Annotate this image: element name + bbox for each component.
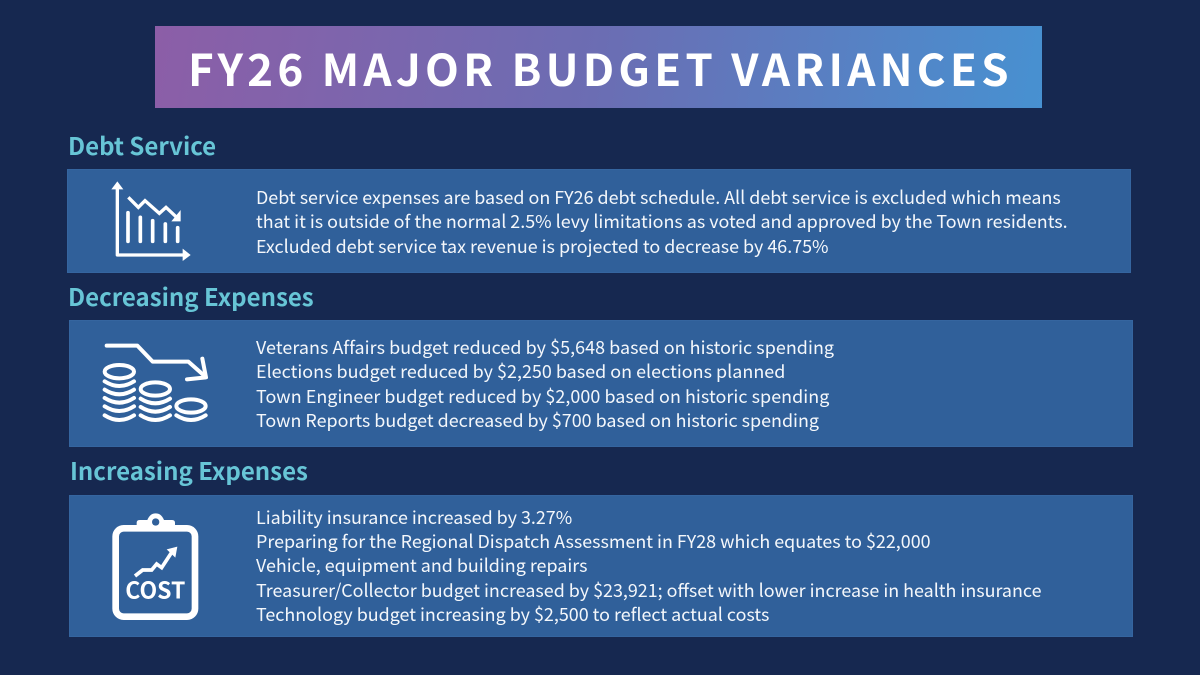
heading: decreasing expenses: Decreasing Expenses: [68, 278, 314, 313]
text: debt service: [256, 184, 1068, 259]
text: decreasing expenses: Elections budget reduced by $2,250 based on elections planned: [256, 358, 785, 384]
panel: debt service: [67, 169, 1131, 273]
text: debt service: Debt service expenses are based on FY26 debt schedule. All debt service is excluded which means: [256, 184, 1061, 210]
icon: declining chart: [111, 181, 191, 261]
panel: increasing expenses: [69, 495, 1133, 637]
text: decreasing expenses: Town Engineer budget reduced by $2,000 based on historic spending: [256, 383, 829, 409]
text: decreasing expenses: Veterans Affairs budget reduced by $5,648 based on historic spending: [256, 334, 834, 360]
icon: cost clipboard: [116, 513, 195, 617]
panel: decreasing expenses: [69, 320, 1133, 447]
icon: coins with down arrow: [105, 346, 206, 420]
text: decreasing expenses: [256, 334, 834, 433]
text: debt service: Excluded debt service tax revenue is projected to decrease by 46.75%: [256, 233, 829, 259]
icon: cost clipboard: COST: [125, 572, 185, 606]
text: increasing expenses: Technology budget increasing by $2,500 to reflect actual costs: [256, 601, 769, 627]
text: increasing expenses: [256, 504, 1042, 627]
text: increasing expenses: Treasurer/Collector budget increased by $23,921; offset with lower increase in health insurance: [256, 577, 1042, 603]
text: debt service: that it is outside of the normal 2.5% levy limitations as voted and approved by the Town residents.: [256, 208, 1068, 234]
text: increasing expenses: Vehicle, equipment and building repairs: [256, 552, 588, 578]
text: increasing expenses: Preparing for the Regional Dispatch Assessment in FY28 which equates to $22,000: [256, 528, 931, 554]
title: FY26 MAJOR BUDGET VARIANCES: [188, 35, 1013, 99]
text: increasing expenses: Liability insurance increased by 3.27%: [256, 504, 572, 530]
heading: increasing expenses: Increasing Expenses: [70, 452, 308, 487]
title banner: [155, 26, 1042, 108]
text: decreasing expenses: Town Reports budget decreased by $700 based on historic spending: [256, 407, 819, 433]
heading: debt service: Debt Service: [68, 127, 216, 162]
